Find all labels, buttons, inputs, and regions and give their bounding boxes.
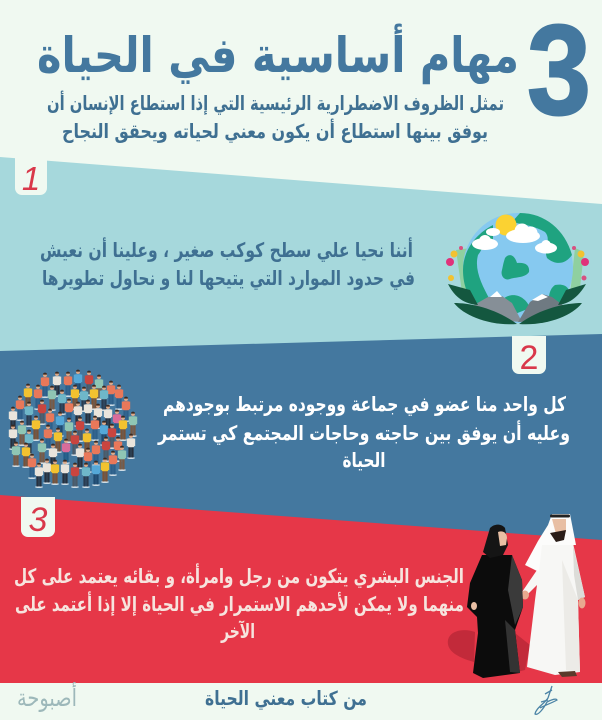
logo left: أصبوحة: [17, 682, 77, 712]
woman abaya: [467, 525, 523, 678]
signature right: [535, 686, 557, 714]
continents: [463, 225, 493, 308]
flowers right: [570, 246, 589, 295]
subtitle: يوفق بينها استطاع أن يكون معني لحياته ويحقق النجاح: [62, 119, 488, 143]
title: مهام أساسية في الحياة: [37, 23, 519, 84]
section 1 text: في حدود الموارد التي يتيحها لنا و نحاول تطويرها: [42, 266, 415, 291]
number tab 2: [512, 336, 546, 377]
number tab 1: 1: [22, 160, 40, 197]
clouds: [472, 224, 557, 254]
icon: crowd of people: [9, 370, 137, 488]
panel: section 3 red: [0, 495, 602, 683]
globe ocean: [463, 213, 573, 323]
mountains: [474, 296, 522, 322]
section 3 text: [14, 562, 464, 643]
footer bar: [0, 683, 602, 720]
icon: globe with leaves: [446, 213, 589, 324]
shadow: [448, 630, 530, 672]
section 3 text: الجنس البشري يتكون من رجل وامرأة، و بقائه يعتمد على كل: [14, 562, 464, 589]
man: [521, 514, 586, 677]
section 1 text: [40, 236, 415, 291]
number tab 1: [15, 158, 47, 197]
section 2 text: [157, 392, 570, 472]
subtitle: [47, 91, 504, 143]
number tab 2: 2: [520, 339, 538, 377]
panel: section 2 blue: [0, 334, 602, 545]
illustration: couple: [448, 514, 586, 678]
section 3 text: الآخر: [220, 619, 255, 643]
big number 3: 3: [527, 0, 591, 142]
keffiyeh: [525, 514, 576, 572]
number tab 3: [21, 497, 55, 539]
leaves: [454, 303, 517, 324]
number tab 3: 3: [29, 501, 48, 539]
panel: section 1 teal: [0, 157, 602, 356]
section 3 text: منهما ولا يمكن لأحدهم الاستمرار في الحياة إلا إذا أعتمد على: [15, 590, 464, 617]
sun: [496, 214, 516, 236]
footer text: من كتاب معني الحياة: [205, 687, 367, 710]
section 2 text: الحياة: [342, 448, 386, 472]
flowers left: [446, 246, 474, 295]
section 1 text: أننا نحيا علي سطح كوكب صغير ، وعلينا أن نعيش: [40, 236, 413, 263]
